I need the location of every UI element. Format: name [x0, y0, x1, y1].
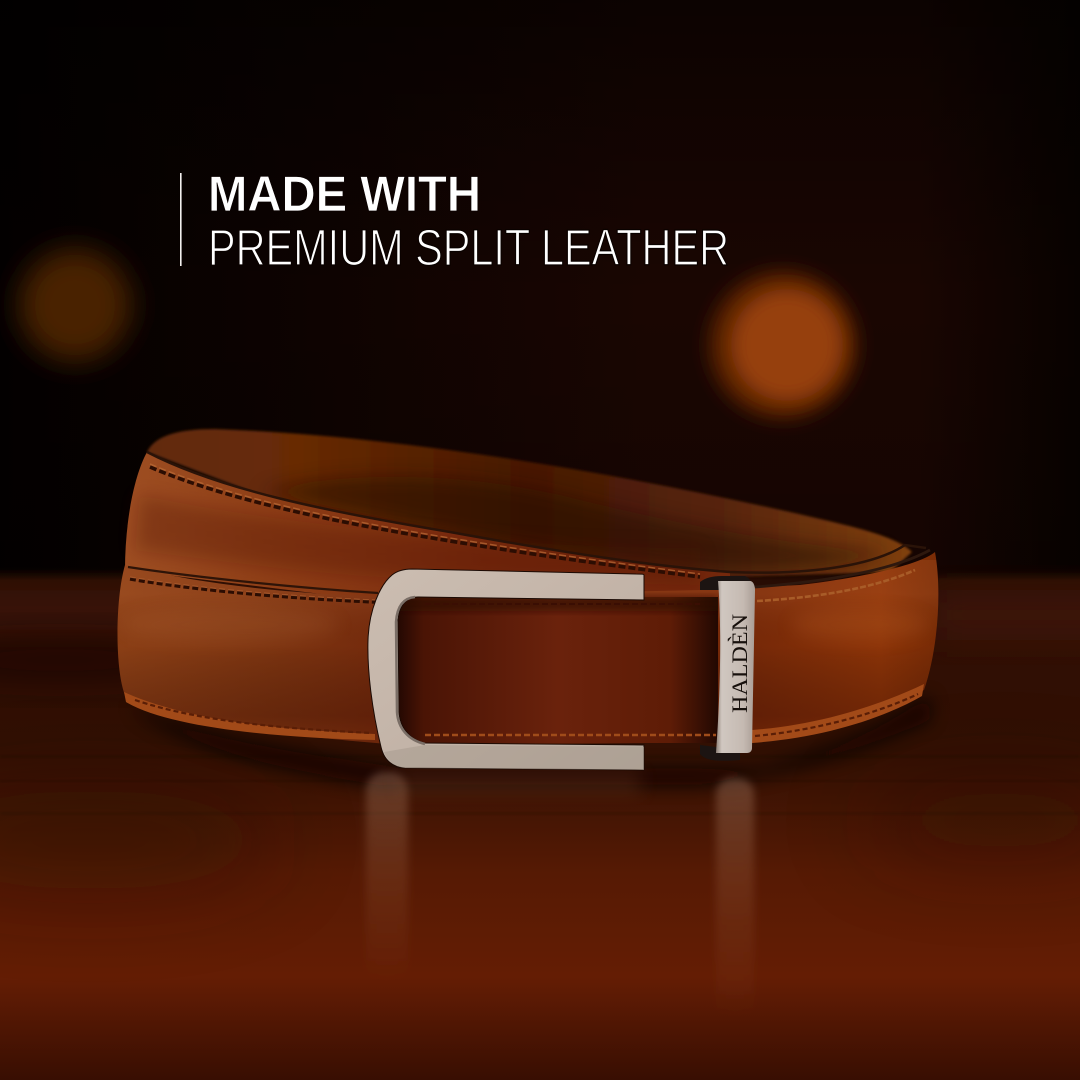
front top stitching right — [757, 570, 915, 601]
bottom welt left — [124, 692, 375, 740]
buckle frame — [368, 569, 644, 770]
front top stitching left — [130, 579, 375, 602]
upper back band — [125, 452, 730, 600]
keeper reflection on table — [716, 778, 754, 1018]
bokeh light left — [19, 249, 131, 361]
upper stitching — [150, 467, 700, 577]
upper edge line — [147, 452, 926, 573]
subheading: premium split leather: PREMIUM SPLIT LEATHER — [208, 219, 729, 276]
buckle inner bevel — [396, 597, 425, 744]
inner shadow of back loop — [260, 477, 890, 570]
belt — [100, 429, 950, 770]
belt inside back loop — [147, 429, 912, 578]
front band shading — [100, 560, 950, 750]
front top edge line — [128, 567, 378, 593]
vertical divider line — [180, 173, 182, 266]
buckle — [368, 569, 644, 770]
keeper loop — [700, 576, 755, 761]
brand name on keeper: HALDÈN — [727, 614, 752, 713]
inner strap stitching — [425, 734, 716, 736]
belt shadow on table — [130, 695, 930, 785]
dark background — [0, 0, 1080, 590]
heading group — [180, 166, 729, 276]
upper band shading — [135, 495, 700, 585]
buckle reflection on table — [366, 772, 408, 982]
buckle lower shade — [384, 745, 644, 770]
front band — [118, 552, 938, 745]
wooden table — [0, 565, 1080, 1080]
bokeh light right — [709, 271, 857, 419]
buckle bar reflection on table — [400, 772, 640, 794]
inner strap within buckle — [398, 597, 718, 743]
heading: made with: MADE WITH — [208, 166, 481, 222]
bottom welt right — [752, 684, 924, 743]
